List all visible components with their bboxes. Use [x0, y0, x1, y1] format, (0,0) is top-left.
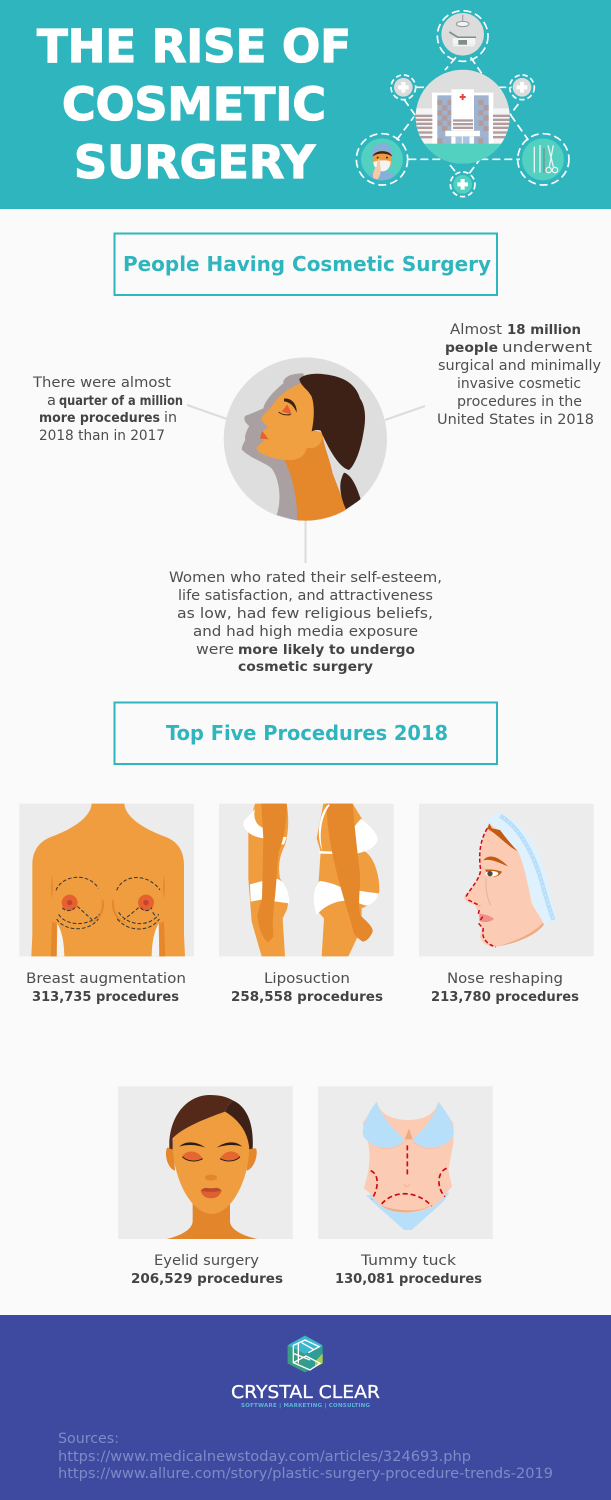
icon: crystal hexagon	[288, 1336, 323, 1372]
procedure: eyelid surgery	[118, 1086, 293, 1287]
procedure: tummy tuck	[318, 1086, 493, 1287]
icon: hospital	[416, 70, 510, 164]
icon: small medical crosses	[394, 78, 531, 194]
label: Nose reshaping	[447, 971, 563, 987]
text: 18 million people: invasive cosmetic	[457, 376, 581, 392]
text: quarter of a million: a	[47, 393, 56, 409]
title	[37, 20, 351, 189]
sources: https://www.medicalnewstoday.com/articles/324693.php	[58, 1449, 471, 1465]
title: THE RISE OF	[37, 20, 351, 73]
text: self-esteem finding: and had high media exposure	[193, 624, 418, 640]
title: COSMETIC	[62, 78, 326, 131]
logo: SOFTWARE | MARKETING | CONSULTING	[241, 1403, 370, 1409]
procedure: nose reshaping	[419, 804, 594, 1005]
procedure: liposuction	[219, 804, 394, 1005]
label: 258,558 procedures	[231, 989, 383, 1005]
footer	[0, 1315, 611, 1500]
text: self-esteem finding: more likely to undergo	[238, 642, 415, 658]
text: self-esteem finding: were	[196, 642, 234, 658]
text: quarter of a million: There were almost	[32, 375, 172, 391]
text: quarter of a million	[32, 375, 183, 444]
text: 18 million people: procedures in the	[457, 394, 582, 410]
sources: https://www.allure.com/story/plastic-surgery-procedure-trends-2019	[58, 1466, 553, 1482]
section heading: people	[114, 234, 497, 295]
label: Liposuction	[264, 971, 350, 987]
text: 18 million people: people	[445, 340, 498, 356]
label: Breast augmentation	[26, 971, 186, 987]
text: 18 million people: Almost	[450, 322, 503, 338]
logo: CRYSTAL CLEAR	[231, 1383, 380, 1403]
icon: medical network	[356, 11, 569, 197]
text: 18 million people: United States in 2018	[437, 412, 594, 428]
label	[231, 971, 383, 1005]
section heading: people: People Having Cosmetic Surgery	[123, 252, 491, 276]
illustration: woman front view	[118, 1086, 293, 1239]
illustration: abdomen	[318, 1086, 493, 1239]
illustration: torso	[19, 804, 194, 956]
label	[131, 1253, 283, 1287]
text: 18 million people	[437, 322, 601, 428]
text: self-esteem finding: as low, had few religious beliefs,	[177, 606, 433, 622]
connector lines	[187, 405, 425, 563]
label	[26, 971, 186, 1005]
icon: operating table	[441, 13, 484, 56]
label: Eyelid surgery	[154, 1253, 259, 1269]
procedure: breast augmentation	[19, 804, 194, 1005]
label	[335, 1253, 482, 1287]
label: Tummy tuck	[360, 1253, 457, 1269]
icon: surgical tools	[522, 138, 564, 180]
text: self-esteem finding	[169, 570, 442, 675]
text: 18 million people: surgical and minimally	[438, 358, 601, 374]
text: quarter of a million: 2018 than in 2017	[39, 428, 165, 444]
icon: surgeon	[361, 138, 403, 180]
text: quarter of a million: quarter of a million	[59, 393, 183, 409]
text: self-esteem finding: cosmetic surgery	[238, 659, 373, 675]
label: 213,780 procedures	[431, 989, 579, 1005]
header banner	[0, 0, 611, 209]
text: self-esteem finding: life satisfaction, and attractiveness	[178, 588, 433, 604]
logo	[231, 1336, 380, 1409]
illustration: woman profile	[224, 357, 387, 527]
text: 18 million people: 18 million	[507, 322, 581, 338]
section heading: top five: Top Five Procedures 2018	[166, 721, 448, 745]
label: 206,529 procedures	[131, 1271, 283, 1287]
illustration: face in profile	[419, 804, 594, 956]
text: quarter of a million: in	[164, 410, 177, 426]
text: quarter of a million: more procedures	[39, 410, 160, 426]
sources	[58, 1431, 553, 1482]
illustration: body before and after	[219, 804, 394, 956]
section heading: top five	[114, 702, 497, 764]
title: SURGERY	[74, 136, 316, 189]
text: self-esteem finding: Women who rated their self-esteem,	[169, 570, 442, 586]
text: 18 million people: underwent	[502, 340, 593, 356]
label: 313,735 procedures	[32, 989, 179, 1005]
label	[431, 971, 579, 1005]
sources: Sources:	[58, 1431, 119, 1447]
label: 130,081 procedures	[335, 1271, 482, 1287]
